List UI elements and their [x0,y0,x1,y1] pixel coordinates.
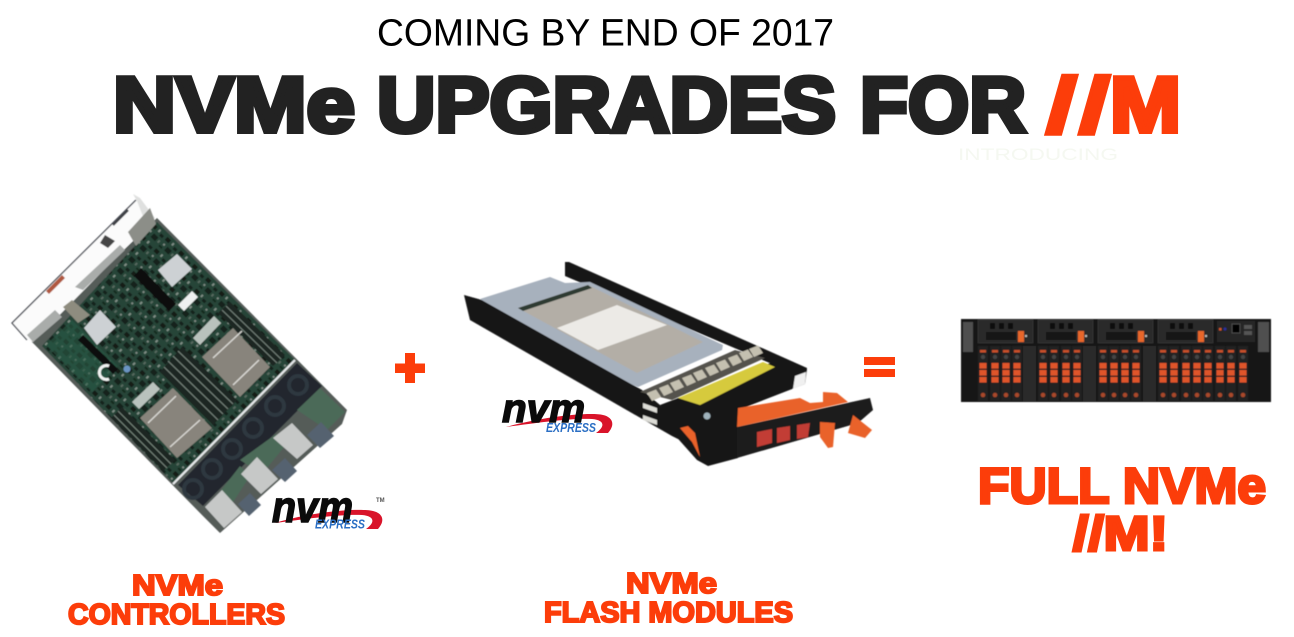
rear connectors [238,422,334,516]
equals sign [864,357,895,377]
drive module photo illustration [464,262,873,466]
title: NVMe upgrades for //M [113,60,1181,150]
processor sockets [132,316,221,409]
upper memory modules [218,302,285,366]
bracket outline [12,200,136,340]
far tray rail [565,262,807,378]
center memory modules [160,347,237,425]
lower processor heat spreader [140,388,212,458]
black expansion slots [78,268,176,374]
title: NVMe upgrades for //M: FOR [860,60,1026,148]
nvm express logo: flash module [502,387,612,435]
faint ghost word: introducing: INTRODUCING [958,145,1118,164]
white divider bar [173,360,295,484]
silver heat sinks [84,254,198,345]
bezel screw [704,412,710,420]
blank bay vents [1023,346,1156,401]
chassis ears [963,322,1269,352]
red bracket label [46,275,65,294]
bay latch band [640,350,765,400]
ssd drive face [518,285,703,373]
yellow warning label [678,362,775,405]
nvm express logo: controller: nvm [272,483,353,532]
near tray rail [464,295,680,440]
result label: full nvme //m: FULL NVMe [978,458,1266,514]
handle orange bar [737,392,848,427]
label: nvme controllers [68,570,285,631]
network port [63,300,90,323]
drive bays [978,346,1248,401]
label: nvme flash modules: FLASH MODULES [544,597,793,629]
black handle [737,398,873,458]
bezel window [793,372,806,389]
chassis [961,319,1271,402]
green circuit board [42,222,295,483]
nvm express logo: flash module: nvm [502,387,585,431]
title: NVMe upgrades for //M: NVMe [113,60,355,148]
bracket latch [100,235,115,248]
title: NVMe upgrades for //M: // [1045,61,1111,150]
orange left latch [680,426,700,457]
label: nvme flash modules [544,568,793,629]
bay latch tabs [647,346,763,401]
nvm express logo: controller: EXPRESS [315,518,366,532]
rear riser boards [215,388,345,510]
plus sign [395,353,425,383]
label: nvme controllers: NVMe [132,570,223,602]
ssd dark top edge [518,285,592,311]
nvm express logo: flash module: EXPRESS [546,421,597,435]
fan row [178,363,322,506]
handle orange tabs [820,415,872,448]
nvm express logo: controller: TM [376,498,385,504]
white front bracket [12,200,153,342]
bracket connector strips [27,208,156,342]
label: nvme controllers: CONTROLLERS [68,599,285,631]
board outer rim [30,218,347,533]
result label: full nvme //m [978,458,1266,561]
status panel [1217,321,1255,342]
label: nvme flash modules: NVMe [626,568,717,600]
bracket dark slot [113,210,128,225]
green patch near bracket [46,320,118,392]
bracket top corner [133,194,155,224]
logo c and blue connector [99,366,130,380]
front white clips [643,403,657,425]
result label: full nvme //m: //M! [1073,508,1168,561]
front bezel [660,362,807,466]
lower memory modules [111,407,175,471]
ssd white label [557,305,667,350]
title: NVMe upgrades for //M: UPGRADES [377,60,836,148]
upper processor heat spreader [202,328,270,397]
handle red windows [757,423,810,447]
rear heat sinks [205,423,313,528]
full nvme storage array illustration [961,319,1271,402]
controller board photo illustration [12,194,347,533]
subtitle: coming by end of 2017: COMING BY END OF 2017 [377,12,834,54]
silver carrier [480,277,723,387]
controller modules [978,320,1213,343]
title: NVMe upgrades for //M: M [1110,60,1181,148]
